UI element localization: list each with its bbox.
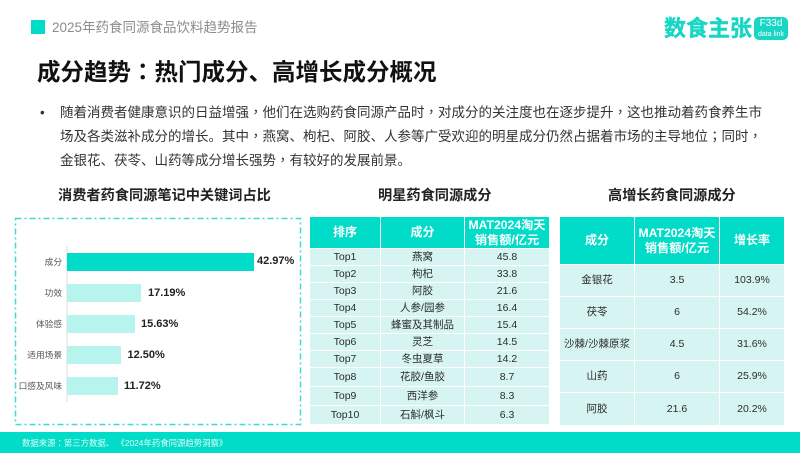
title: 成分趋势：热门成分、高增长成分概况 (37, 53, 436, 87)
logo (664, 16, 788, 41)
table: star ingredients: 14.5 (497, 336, 517, 348)
table: star ingredients: Top4 (334, 302, 356, 314)
table: high growth ingredients: 103.9% (734, 274, 770, 286)
table: star ingredients: 8.7 (500, 370, 514, 382)
table: star ingredients: Top3 (334, 284, 356, 296)
chart axis (66, 246, 68, 402)
logo badge: data link (758, 31, 784, 38)
panel: keyword bar chart (14, 218, 302, 426)
table: high growth ingredients: 21.6 (667, 402, 687, 414)
intro paragraph (40, 101, 762, 169)
table: star ingredients: 排序 (333, 225, 357, 239)
table: high growth ingredients: 茯苓 (586, 306, 608, 318)
logo badge (754, 17, 788, 40)
table: star ingredients: 销售额/亿元 (475, 232, 539, 246)
table: high growth ingredients: 阿胶 (586, 402, 608, 414)
bar: 适用场景: 12.50% (128, 349, 165, 361)
bar: 功效: 17.19% (148, 287, 185, 299)
bar: 体验感 (36, 315, 178, 333)
heading: star ingredients: 明星药食同源成分 (378, 188, 492, 204)
table: high growth ingredients: 6 (674, 306, 680, 318)
table: star ingredients: 花胶/鱼胶 (400, 370, 445, 382)
heading: high growth ingredients: 高增长药食同源成分 (608, 188, 736, 204)
table: star ingredients: 燕窝 (412, 250, 433, 262)
table: high growth ingredients: 20.2% (737, 402, 767, 414)
bullet: • (40, 105, 45, 120)
table: high growth ingredients: 沙棘/沙棘原浆 (564, 338, 630, 350)
table: high growth ingredients (560, 217, 784, 425)
table: high growth ingredients: MAT2024淘天 (638, 226, 715, 240)
table: star ingredients: 石斛/枫斗 (400, 408, 445, 420)
table: star ingredients: 冬虫夏草 (402, 352, 444, 364)
table: star ingredients: 西洋参 (407, 390, 438, 402)
bar: 功效 (45, 284, 185, 302)
bar: 成分 (45, 253, 294, 271)
table: star ingredients: 16.4 (497, 302, 517, 314)
report name: 2025年药食同源食品饮料趋势报告 (52, 20, 258, 35)
table: star ingredients: Top5 (334, 318, 356, 330)
table: high growth ingredients: 6 (674, 370, 680, 382)
table: star ingredients: 14.2 (497, 352, 517, 364)
table: star ingredients: 枸杞 (412, 268, 433, 280)
logo wordmark: 数食主张 (664, 16, 752, 41)
table: star ingredients: 6.3 (500, 408, 514, 420)
bar: 体验感: 15.63% (141, 318, 178, 330)
table: high growth ingredients: 31.6% (737, 338, 767, 350)
table: high growth ingredients: 山药 (586, 370, 608, 382)
table: high growth ingredients: 销售额/亿元 (645, 240, 709, 254)
table: star ingredients: Top10 (331, 408, 359, 420)
table: star ingredients (310, 217, 549, 424)
source note: 数据来源：第三方数据、 《2024年药食同源趋势洞察》 (22, 437, 227, 449)
table: star ingredients: 21.6 (497, 284, 517, 296)
table: star ingredients: 阿胶 (412, 284, 433, 296)
table: high growth ingredients: 成分 (585, 233, 609, 247)
table: star ingredients: 15.4 (497, 318, 517, 330)
table: star ingredients: Top2 (334, 268, 356, 280)
table: high growth ingredients: 3.5 (670, 274, 684, 286)
bar: 适用场景 (27, 346, 165, 364)
bar: 适用场景: 适用场景 (27, 350, 62, 360)
table: high growth ingredients: 4.5 (670, 338, 684, 350)
table: star ingredients: Top9 (334, 390, 356, 402)
paragraph text: 场及各类滋补成分的增长。其中，燕窝、枸杞、阿胶、人参等广受欢迎的明星成分仍然占据着市场的主导地位；同时， (60, 125, 762, 145)
table: star ingredients: Top8 (334, 370, 356, 382)
table: star ingredients: Top7 (334, 352, 356, 364)
table: high growth ingredients: 25.9% (737, 370, 767, 382)
table: star ingredients: 人参/园参 (400, 302, 445, 314)
paragraph text (60, 101, 762, 169)
bar: 口感及风味: 11.72% (124, 380, 161, 392)
bar: 成分: 成分 (45, 257, 62, 267)
table: star ingredients: 33.8 (497, 268, 517, 280)
table: high growth ingredients: 54.2% (737, 306, 767, 318)
table: high growth ingredients: 金银花 (581, 274, 613, 286)
table: star ingredients: MAT2024淘天 (468, 218, 545, 232)
heading: keywords: 消费者药食同源笔记中关键词占比 (58, 188, 271, 204)
footer band (0, 432, 800, 453)
table: star ingredients: 成分 (410, 225, 434, 239)
table: high growth ingredients: 增长率 (734, 233, 770, 247)
table: star ingredients: 灵芝 (412, 336, 433, 348)
paragraph text: 金银花、茯苓、山药等成分增长强势，有较好的发展前景。 (60, 149, 411, 169)
paragraph text: 随着消费者健康意识的日益增强，他们在选购药食同源产品时，对成分的关注度也在逐步提升，这也推动着药食养生市 (60, 101, 762, 121)
bar: 功效: 功效 (45, 288, 62, 298)
bar: 成分: 42.97% (257, 255, 294, 267)
table: star ingredients: 45.8 (497, 250, 517, 262)
table: star ingredients: Top1 (334, 250, 356, 262)
table: star ingredients: 蜂蜜及其制品 (391, 318, 454, 330)
table: star ingredients: 8.3 (500, 390, 514, 402)
bar: 口感及风味 (19, 377, 161, 395)
dashed frame (14, 218, 302, 426)
logo badge: F33d (760, 18, 782, 29)
table: star ingredients: Top6 (334, 336, 356, 348)
bar: 体验感: 体验感 (36, 319, 62, 329)
bar: 口感及风味: 口感及风味 (19, 381, 62, 391)
header square icon (31, 20, 45, 34)
